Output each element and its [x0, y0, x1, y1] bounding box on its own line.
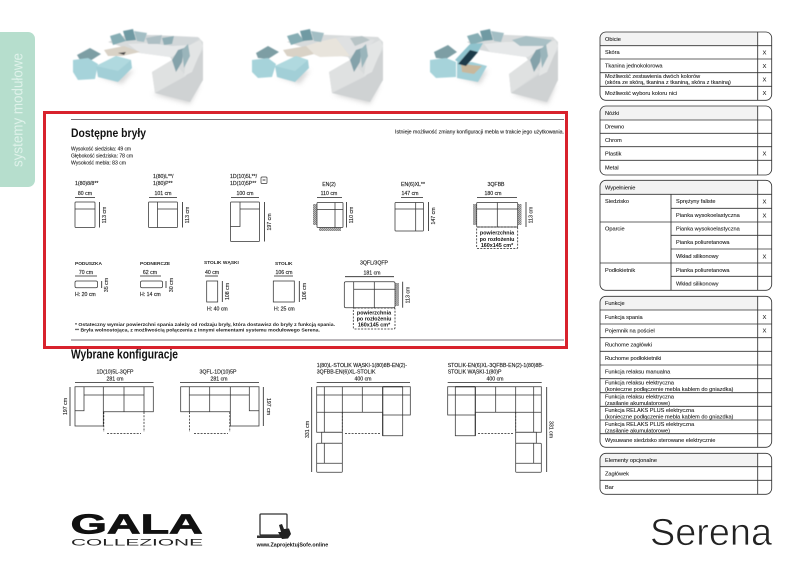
- table: funkcje: X: [763, 315, 767, 321]
- configuration: 3QFL-1D(10)5P: 281 cm: [210, 376, 228, 382]
- configuration: 1(80)L-stolik wąski: 1(80)L-STOLIK WĄSKI-1(80)8B-EN(2)-: [317, 363, 407, 369]
- configuration: stolik-EN(6)XL: 331 cm: [548, 421, 554, 438]
- module: 3QFL/3QFP: po rozłożeniu: [357, 316, 391, 322]
- table: obicie: Możliwość zestawienia dwóch kolorów: [605, 74, 701, 80]
- module: stolik wąski: 108 cm: [225, 283, 231, 300]
- table: obicie: Możliwość wyboru koloru nici: [605, 91, 677, 97]
- module: stolik wąski: STOLIK WĄSKI: [204, 260, 239, 266]
- module: podnercze: [140, 261, 175, 298]
- module: 3QFL/3QFP: 3QFL/3QFP: [360, 260, 389, 266]
- configuration: 1D(10)5L-3QFP: [63, 370, 154, 434]
- photo: sofa with open seat: [252, 29, 383, 104]
- module: 1(80)8/8: 1(80)8/8**: [75, 181, 98, 187]
- table: funkcje: X: [763, 328, 767, 334]
- module: podnercze: PODNERCZE: [140, 261, 171, 267]
- table: funkcje: (zasilanie akumulatorowe): [605, 401, 670, 407]
- configuration: 1(80)L-stolik wąski: 3QFBB-EN(6)XL-STOLIK: [317, 370, 376, 376]
- title: Serena: Serena: [650, 512, 773, 554]
- module: 1(80)8/8: [75, 181, 108, 228]
- module: EN(2): 110 cm: [349, 207, 355, 223]
- text: heights: Głębokość siedziska: 78 cm: [71, 154, 133, 160]
- module: 1D(10)5L / 1D(10)5P: 1D(10)5P**: [230, 181, 256, 187]
- module: stolik wąski: 40 cm: [205, 270, 219, 276]
- configuration: stolik-EN(6)XL: STOLIK-EN(6)XL-3QFBB-EN(2)-1(80)8B-: [448, 363, 544, 369]
- table: wypełnienie: Pianka wysokoelastyczna: [676, 213, 741, 219]
- table: funkcje: (konieczne podłączenie mebla kablem do gniazdka): [605, 414, 734, 420]
- module: podnercze: 30 cm: [169, 278, 175, 292]
- table: obicie: X: [763, 50, 767, 56]
- table: obicie: Skóra: [605, 50, 621, 56]
- table: funkcje: [600, 296, 772, 447]
- panel: dostępne bryły: [71, 120, 564, 340]
- configuration: 3QFL-1D(10)5P: 197 cm: [265, 398, 271, 415]
- table: elementy opcjonalne: [600, 453, 772, 494]
- table: funkcje: Funkcje: [605, 301, 625, 307]
- text: heights: Wysokość mebla: 83 cm: [71, 160, 126, 166]
- module: 3QFL/3QFP: 160x145 cm*: [358, 322, 391, 328]
- configuration: 3QFL-1D(10)5P: 3QFL-1D(10)5P: [200, 370, 237, 376]
- footnotes: [75, 322, 335, 332]
- configuration: stolik-EN(6)XL: 400 cm: [486, 376, 504, 382]
- table: obicie: X: [763, 64, 767, 70]
- module: EN(2): [313, 182, 355, 231]
- module: 3QFBB: 3QFBB: [487, 182, 505, 188]
- table: funkcje: Funkcja relaksu manualna: [605, 370, 671, 376]
- table: wypełnienie: Oparcie: [605, 226, 625, 232]
- module: EN(6)XL: EN(6)XL**: [401, 182, 425, 188]
- table: obicie: Obicie: [605, 37, 621, 43]
- module: poduszka: [75, 261, 110, 298]
- footnotes: ** Bryła wolnostojąca, z możliwością połączenia z innymi elementami systemu modułowego Serena.: [75, 328, 320, 332]
- module: podnercze: 62 cm: [143, 270, 157, 276]
- module: stolik: 106 cm: [302, 283, 308, 300]
- module: 1D(10)5L / 1D(10)5P: 197 cm: [267, 213, 273, 231]
- table: wypełnienie: X: [763, 200, 767, 206]
- table: wypełnienie: Sprężyny faliste: [676, 199, 715, 205]
- module: EN(6)XL: 147 cm: [401, 191, 419, 197]
- module: 3QFBB: 180 cm: [484, 191, 502, 197]
- table: wypełnienie: X: [763, 254, 767, 260]
- configuration: 1D(10)5L-3QFP: 197 cm: [63, 398, 69, 415]
- table: funkcje: Ruchome zagłówki: [605, 342, 652, 348]
- module: EN(6)XL: 147 cm: [431, 207, 437, 225]
- table: elementy opcjonalne: Elementy opcjonalne: [605, 458, 657, 464]
- module: 1(80)8/8: 113 cm: [102, 207, 108, 223]
- module: 3QFL/3QFP: 181 cm: [363, 270, 381, 276]
- configuration: 1(80)L-stolik wąski: [305, 363, 410, 472]
- module: EN(2): 110 cm: [321, 191, 337, 197]
- module: podnercze: H: 14 cm: [140, 292, 161, 298]
- panel: red highlight frame: [44, 112, 566, 348]
- table: wypełnienie: Pianka wysokoelastyczna: [676, 226, 741, 232]
- table: wypełnienie: Siedzisko: [605, 199, 629, 205]
- heading: dostępne bryły: Dostępne bryły: [71, 128, 147, 140]
- table: wypełnienie: Pianka poliuretanowa: [676, 268, 730, 274]
- module: stolik wąski: H: 40 cm: [207, 306, 228, 312]
- configuration: 3QFL-1D(10)5P: [180, 370, 271, 434]
- side tab: systemy modułowe: systemy modułowe: [10, 53, 26, 167]
- module: stolik: [273, 261, 308, 312]
- configuration: 1(80)L-stolik wąski: 400 cm: [354, 376, 372, 382]
- table: wypełnienie: Podłokietnik: [605, 268, 635, 274]
- table: elementy opcjonalne: Zagłówek: [605, 472, 629, 478]
- table: nóżki: Metal: [605, 166, 619, 172]
- note: change of configuration: Istnieje możliwość zmiany konfiguracji mebla w trakcie jego użytkowania.: [395, 130, 564, 136]
- logo: Gala Collezione: COLLEZIONE: [71, 538, 203, 548]
- table: funkcje: Funkcja spania: [605, 315, 644, 321]
- link: zaprojektuj sofę: www.ZaprojektujSofe.online: [256, 542, 328, 548]
- module: 1D(10)5L / 1D(10)5P: 100 cm: [236, 191, 254, 197]
- module: stolik wąski: [204, 260, 239, 312]
- table: nóżki: Plastik: [605, 152, 622, 158]
- table: nóżki: Drewno: [605, 124, 624, 130]
- module: 1(80)L / 1(80)P: 1(80)L**/: [153, 174, 174, 180]
- table: funkcje: Ruchome podłokietniki: [605, 356, 661, 362]
- table: funkcje: (konieczne podłączenie mebla kablem do gniazdka): [605, 387, 734, 393]
- table: funkcje: Funkcja relaksu elektryczna: [605, 394, 675, 400]
- module: 3QFBB: po rozłożeniu: [480, 237, 514, 243]
- module: 1(80)L / 1(80)P: 1(80)P**: [153, 181, 173, 187]
- module: 3QFBB: 113 cm: [528, 207, 534, 223]
- module: stolik: STOLIK: [275, 261, 293, 267]
- table: nóżki: Nóżki: [605, 111, 619, 117]
- table: obicie: [600, 32, 772, 100]
- heading: wybrane konfiguracje: Wybrane konfiguracje: [71, 348, 178, 362]
- table: wypełnienie: X: [763, 214, 767, 220]
- table: funkcje: (zasilanie akumulatorowe): [605, 428, 670, 434]
- module: 1(80)L / 1(80)P: 101 cm: [154, 191, 172, 197]
- configuration: 1D(10)5L-3QFP: 1D(10)5L-3QFP: [97, 370, 134, 376]
- configuration: 1D(10)5L-3QFP: 281 cm: [106, 376, 124, 382]
- module: poduszka: 70 cm: [79, 270, 93, 276]
- table: funkcje: Wysuwane siedzisko sterowane elektrycznie: [605, 438, 715, 444]
- configuration: stolik-EN(6)XL: [448, 363, 554, 472]
- logo: Gala Collezione: GALA: [71, 508, 203, 539]
- module: poduszka: 35 cm: [104, 278, 110, 292]
- table: obicie: X: [763, 78, 767, 84]
- configuration: stolik-EN(6)XL: STOLIK WĄSKI-1(80)P: [448, 370, 502, 376]
- module: 3QFL/3QFP: 113 cm: [406, 287, 412, 303]
- module: 1D(10)5L / 1D(10)5P: [230, 174, 273, 242]
- module: 3QFBB: 160x145 cm*: [481, 243, 514, 249]
- side tab: systemy modułowe: [0, 32, 35, 187]
- table: wypełnienie: Wypełnienie: [605, 186, 635, 192]
- module: 3QFBB: powierzchnia: [480, 230, 515, 236]
- table: wypełnienie: Pianka poliuretanowa: [676, 240, 730, 246]
- module: poduszka: PODUSZKA: [75, 261, 102, 267]
- configuration: 1(80)L-stolik wąski: 331 cm: [305, 421, 311, 438]
- table: nóżki: X: [763, 152, 767, 158]
- logo: Gala Collezione: [71, 508, 203, 548]
- photo: sofa with storage lid open: [430, 29, 558, 104]
- table: funkcje: Pojemnik na pościel: [605, 328, 655, 334]
- photo: sofa with ottoman: [73, 29, 203, 104]
- table: obicie: Tkanina jednokolorowa: [605, 64, 663, 70]
- footnotes: * Ostateczny wymiar powierzchni spania zależy od rodzaju bryły, która dostawisz do bryły z funkcją spania.: [75, 322, 335, 327]
- table: nóżki: Chrom: [605, 138, 622, 144]
- module: poduszka: H: 20 cm: [75, 292, 96, 298]
- text: heights: Wysokość siedziska: 49 cm: [71, 146, 131, 152]
- table: wypełnienie: [600, 180, 772, 290]
- table: obicie: X: [763, 91, 767, 97]
- module: stolik: H: 25 cm: [274, 306, 295, 312]
- module: EN(6)XL: [395, 182, 437, 231]
- table: obicie: (skóra ze skórą, tkanina z tkaniną, skóra z tkaniną): [605, 80, 731, 86]
- module: stolik: 106 cm: [275, 270, 293, 276]
- module: EN(2): EN(2): [322, 182, 336, 188]
- module: 3QFL/3QFP: powierzchnia: [357, 310, 392, 316]
- table: funkcje: Funkcja RELAKS PLUS elektryczna: [605, 422, 695, 428]
- module: 1(80)L / 1(80)P: [148, 174, 191, 228]
- module: 1(80)L / 1(80)P: 113 cm: [185, 207, 191, 223]
- table: wypełnienie: Wkład silikonowy: [676, 282, 719, 288]
- module: 1D(10)5L / 1D(10)5P: 1D(10)5L**/: [230, 174, 258, 180]
- table: wypełnienie: Wkład silikonowy: [676, 254, 719, 260]
- icon: laptop with hand: [257, 514, 291, 539]
- module: 3QFL/3QFP: [344, 260, 412, 329]
- module: 1(80)8/8: 80 cm: [78, 191, 92, 197]
- text: heights: [71, 146, 133, 166]
- table: funkcje: Funkcja relaksu elektryczna: [605, 380, 675, 386]
- table: funkcje: Funkcja RELAKS PLUS elektryczna: [605, 408, 695, 414]
- module: 3QFBB: [473, 182, 534, 249]
- table: nóżki: [600, 106, 772, 175]
- table: elementy opcjonalne: Bar: [605, 485, 614, 491]
